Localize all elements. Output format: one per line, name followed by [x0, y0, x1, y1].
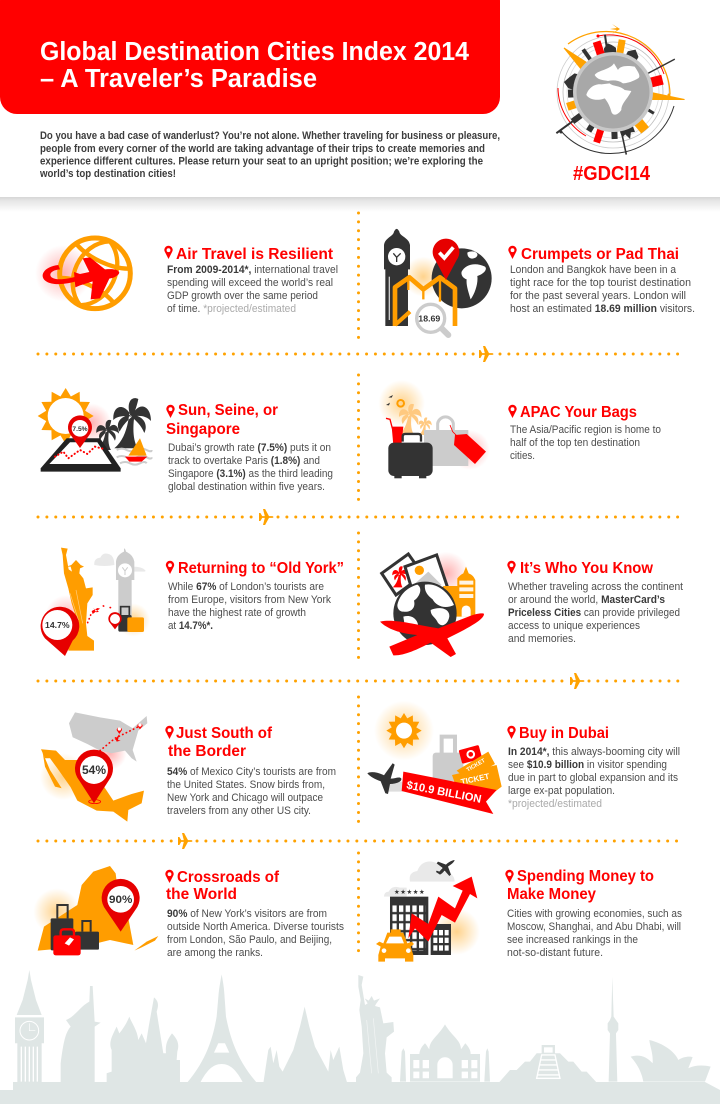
body text: In 2014*, this always-booming city will: [508, 746, 680, 758]
panel: Just South of the Border: [40, 712, 336, 822]
icon: hotel, taxi, plane and rising arrow: ★★★★★: [394, 889, 425, 896]
Burj Al Arab: [61, 986, 101, 1083]
Saint Basil's Cathedral: [107, 997, 180, 1083]
body text: have the highest rate of growth: [168, 607, 306, 619]
heading: [166, 402, 278, 438]
body text: not-so-distant future.: [507, 947, 603, 959]
logo: globe with landmarks: [556, 24, 685, 155]
heading: It’s Who You Know: [520, 560, 654, 577]
body text: [507, 908, 683, 959]
globe continents: [586, 63, 639, 115]
panel: APAC Your Bags: [378, 380, 661, 478]
icon: Statue of Liberty, Big Ben and pins: 14.7%: [45, 620, 70, 630]
heading: the Border: [168, 743, 246, 760]
body text: travelers from any other US city.: [167, 805, 311, 817]
header shadow band: [0, 197, 720, 212]
body text: [168, 442, 333, 493]
location pin: [166, 405, 175, 418]
icon: New York state map and suitcases: [33, 866, 158, 955]
plane marker 2: [259, 509, 274, 525]
intro text: experience different cultures. Please return your seat to an upright position; we’re exploring the: [40, 156, 483, 168]
heading: [168, 725, 273, 760]
icon: Big Ben, globe and map: 18.69: [418, 314, 441, 324]
body text: GDP growth over the same period: [167, 290, 318, 302]
icon: Big Ben, globe and map: [384, 229, 492, 335]
icon: Statue of Liberty, Big Ben and pins: [41, 548, 150, 656]
CN Tower: [608, 977, 618, 1082]
body text: and memories.: [508, 633, 576, 645]
body text: Dubai’s growth rate (7.5%) puts it on: [168, 442, 331, 454]
body text: [510, 424, 661, 462]
body text: New York and Chicago will outpace: [167, 792, 323, 804]
icon: sun, luggage, tickets and ribbon: [367, 701, 502, 814]
Eiffel Tower: [187, 974, 257, 1083]
intro text: [39, 130, 500, 180]
heading: Just South of: [176, 725, 273, 742]
body text: cities.: [510, 450, 535, 462]
heading: Buy in Dubai: [519, 725, 609, 742]
body text: from Europe, visitors from New York: [168, 594, 332, 606]
panel: Returning to Old York: [41, 548, 344, 656]
heading: Crumpets or Pad Thai: [521, 246, 679, 263]
icon: sun, luggage, tickets and ribbon: $10.9 BILLION: [405, 780, 482, 806]
location pin: [507, 726, 516, 739]
body text: outside North America. Diverse tourists: [167, 921, 345, 933]
panel: It's Who You Know: [380, 552, 683, 657]
header banner: [0, 0, 500, 114]
body text: tight race for the top tourist destination: [510, 277, 691, 289]
body text: see $10.9 billion in visitor spending: [508, 759, 667, 771]
Thai temple: [263, 1007, 347, 1083]
heading: [166, 869, 280, 903]
ground: [0, 1082, 720, 1104]
heading: Spending Money to: [517, 868, 654, 885]
body text: Cities with growing economies, such as: [507, 908, 683, 920]
heading: Sun, Seine, or: [178, 402, 278, 419]
location pin: [507, 561, 516, 574]
Statue of Liberty: [356, 975, 394, 1083]
body text: London and Bangkok have been in a: [510, 264, 676, 276]
heading: Air Travel is Resilient: [176, 246, 334, 263]
body text: large ex-pat population.: [508, 785, 615, 797]
heading: Returning to “Old York”: [178, 560, 344, 577]
body text: see increased rankings in the: [507, 934, 638, 946]
body text: track to overtake Paris (1.8%) and: [168, 455, 320, 467]
body text: at 14.7%*.: [168, 620, 213, 632]
title: – A Traveler’s Paradise: [40, 65, 317, 93]
icon: sun, map, palms and boat: [38, 388, 152, 472]
panel: Sun, Seine, or Singapore: [38, 388, 333, 493]
body text: global destination within five years.: [168, 481, 325, 493]
Chichen Itza pyramid: [498, 1045, 597, 1083]
icon: globe and plane: [35, 228, 139, 319]
body text: the United States. Snow birds from,: [167, 779, 325, 791]
body text: [167, 264, 338, 315]
panel: Air Travel is Resilient: [35, 228, 338, 319]
icon: sun, luggage, tickets and ribbon: TICKET: [466, 758, 487, 773]
body text: for the past several years. London will: [510, 290, 686, 302]
body text: 54% of Mexico City’s tourists are from: [167, 766, 336, 778]
body text: 90% of New York’s visitors are from: [167, 908, 327, 920]
body text: Priceless Cities can provide privileged: [508, 607, 680, 619]
icon: photos, globe, building and plane: [380, 552, 484, 657]
heading: the World: [166, 886, 237, 903]
body text: due in part to global expansion and its: [508, 772, 679, 784]
location pin: [508, 246, 517, 259]
skyline of world landmarks: [0, 970, 720, 1104]
heading: Make Money: [507, 886, 596, 903]
body text: From 2009-2014*, international travel: [167, 264, 338, 276]
body text: [508, 581, 683, 645]
body text: Moscow, Shanghai, and Abu Dhabi, will: [507, 921, 681, 933]
body text: [510, 264, 695, 315]
panel: Crumpets or Pad Thai: [384, 229, 695, 335]
panel: Buy in Dubai: [367, 701, 680, 814]
location pin: [505, 870, 514, 883]
Sydney Opera House: [631, 1040, 711, 1082]
panel: Crossroads of the World: [33, 866, 345, 959]
icon: New York state map and suitcases: 90%: [109, 894, 133, 906]
icon: suitcase, shopping bag and tag: [378, 380, 490, 478]
location pin: [164, 246, 173, 259]
icon: sun, map, palms and boat: 7.5%: [72, 426, 88, 433]
intro text: people from every corner of the world are taking advantage of their trips to create memories and: [40, 143, 485, 155]
plane marker 4: [178, 833, 192, 849]
body text: [508, 746, 680, 810]
panel: Spending Money to Make Money: [376, 860, 683, 962]
body text: host an estimated 18.69 million visitors.: [510, 303, 695, 315]
body text: half of the top ten destination: [510, 437, 640, 449]
heading: [507, 868, 654, 903]
body text: from London, São Paulo, and Beijing,: [167, 934, 332, 946]
location pin: [508, 405, 517, 418]
body text: The Asia/Pacific region is home to: [510, 424, 661, 436]
icon: hotel, taxi, plane and rising arrow: [376, 860, 480, 962]
icon: map of US and Mexico: [40, 712, 147, 822]
body text: While 67% of London’s tourists are: [168, 581, 324, 593]
heading: APAC Your Bags: [520, 404, 637, 421]
title: Global Destination Cities Index 2014: [40, 38, 470, 66]
plane marker 1: [479, 346, 494, 362]
body text: *projected/estimated: [508, 798, 602, 810]
location pin: [166, 561, 174, 574]
body text: [167, 908, 345, 959]
icon: sun, luggage, tickets and ribbon: TICKET: [460, 772, 490, 787]
Taj Mahal: [400, 1024, 490, 1082]
plane marker 3: [570, 673, 584, 689]
location pin: [165, 870, 174, 883]
body text: are among the ranks.: [167, 947, 263, 959]
Big Ben: [15, 970, 44, 1083]
body text: [168, 581, 332, 632]
body text: Whether traveling across the continent: [508, 581, 683, 593]
title: [40, 38, 470, 93]
icon: map of US and Mexico: 54%: [82, 763, 106, 777]
heading: Singapore: [166, 421, 240, 438]
heading: Crossroads of: [177, 869, 280, 886]
location pin: [165, 726, 174, 739]
body text: Singapore (3.1%) as the third leading: [168, 468, 333, 480]
body text: of time. *projected/estimated: [167, 303, 296, 315]
body text: or around the world, MasterCard’s: [508, 594, 665, 606]
body text: [167, 766, 336, 817]
body text: spending will exceed the world’s real: [167, 277, 333, 289]
dotted route dividers: [38, 213, 680, 952]
body text: access to unique experiences: [508, 620, 641, 632]
hashtag: #GDCI14: [573, 163, 651, 185]
intro text: world’s top destination cities!: [39, 168, 176, 180]
intro text: Do you have a bad case of wanderlust? You’re not alone. Whether traveling for business or pleasure,: [40, 130, 500, 142]
